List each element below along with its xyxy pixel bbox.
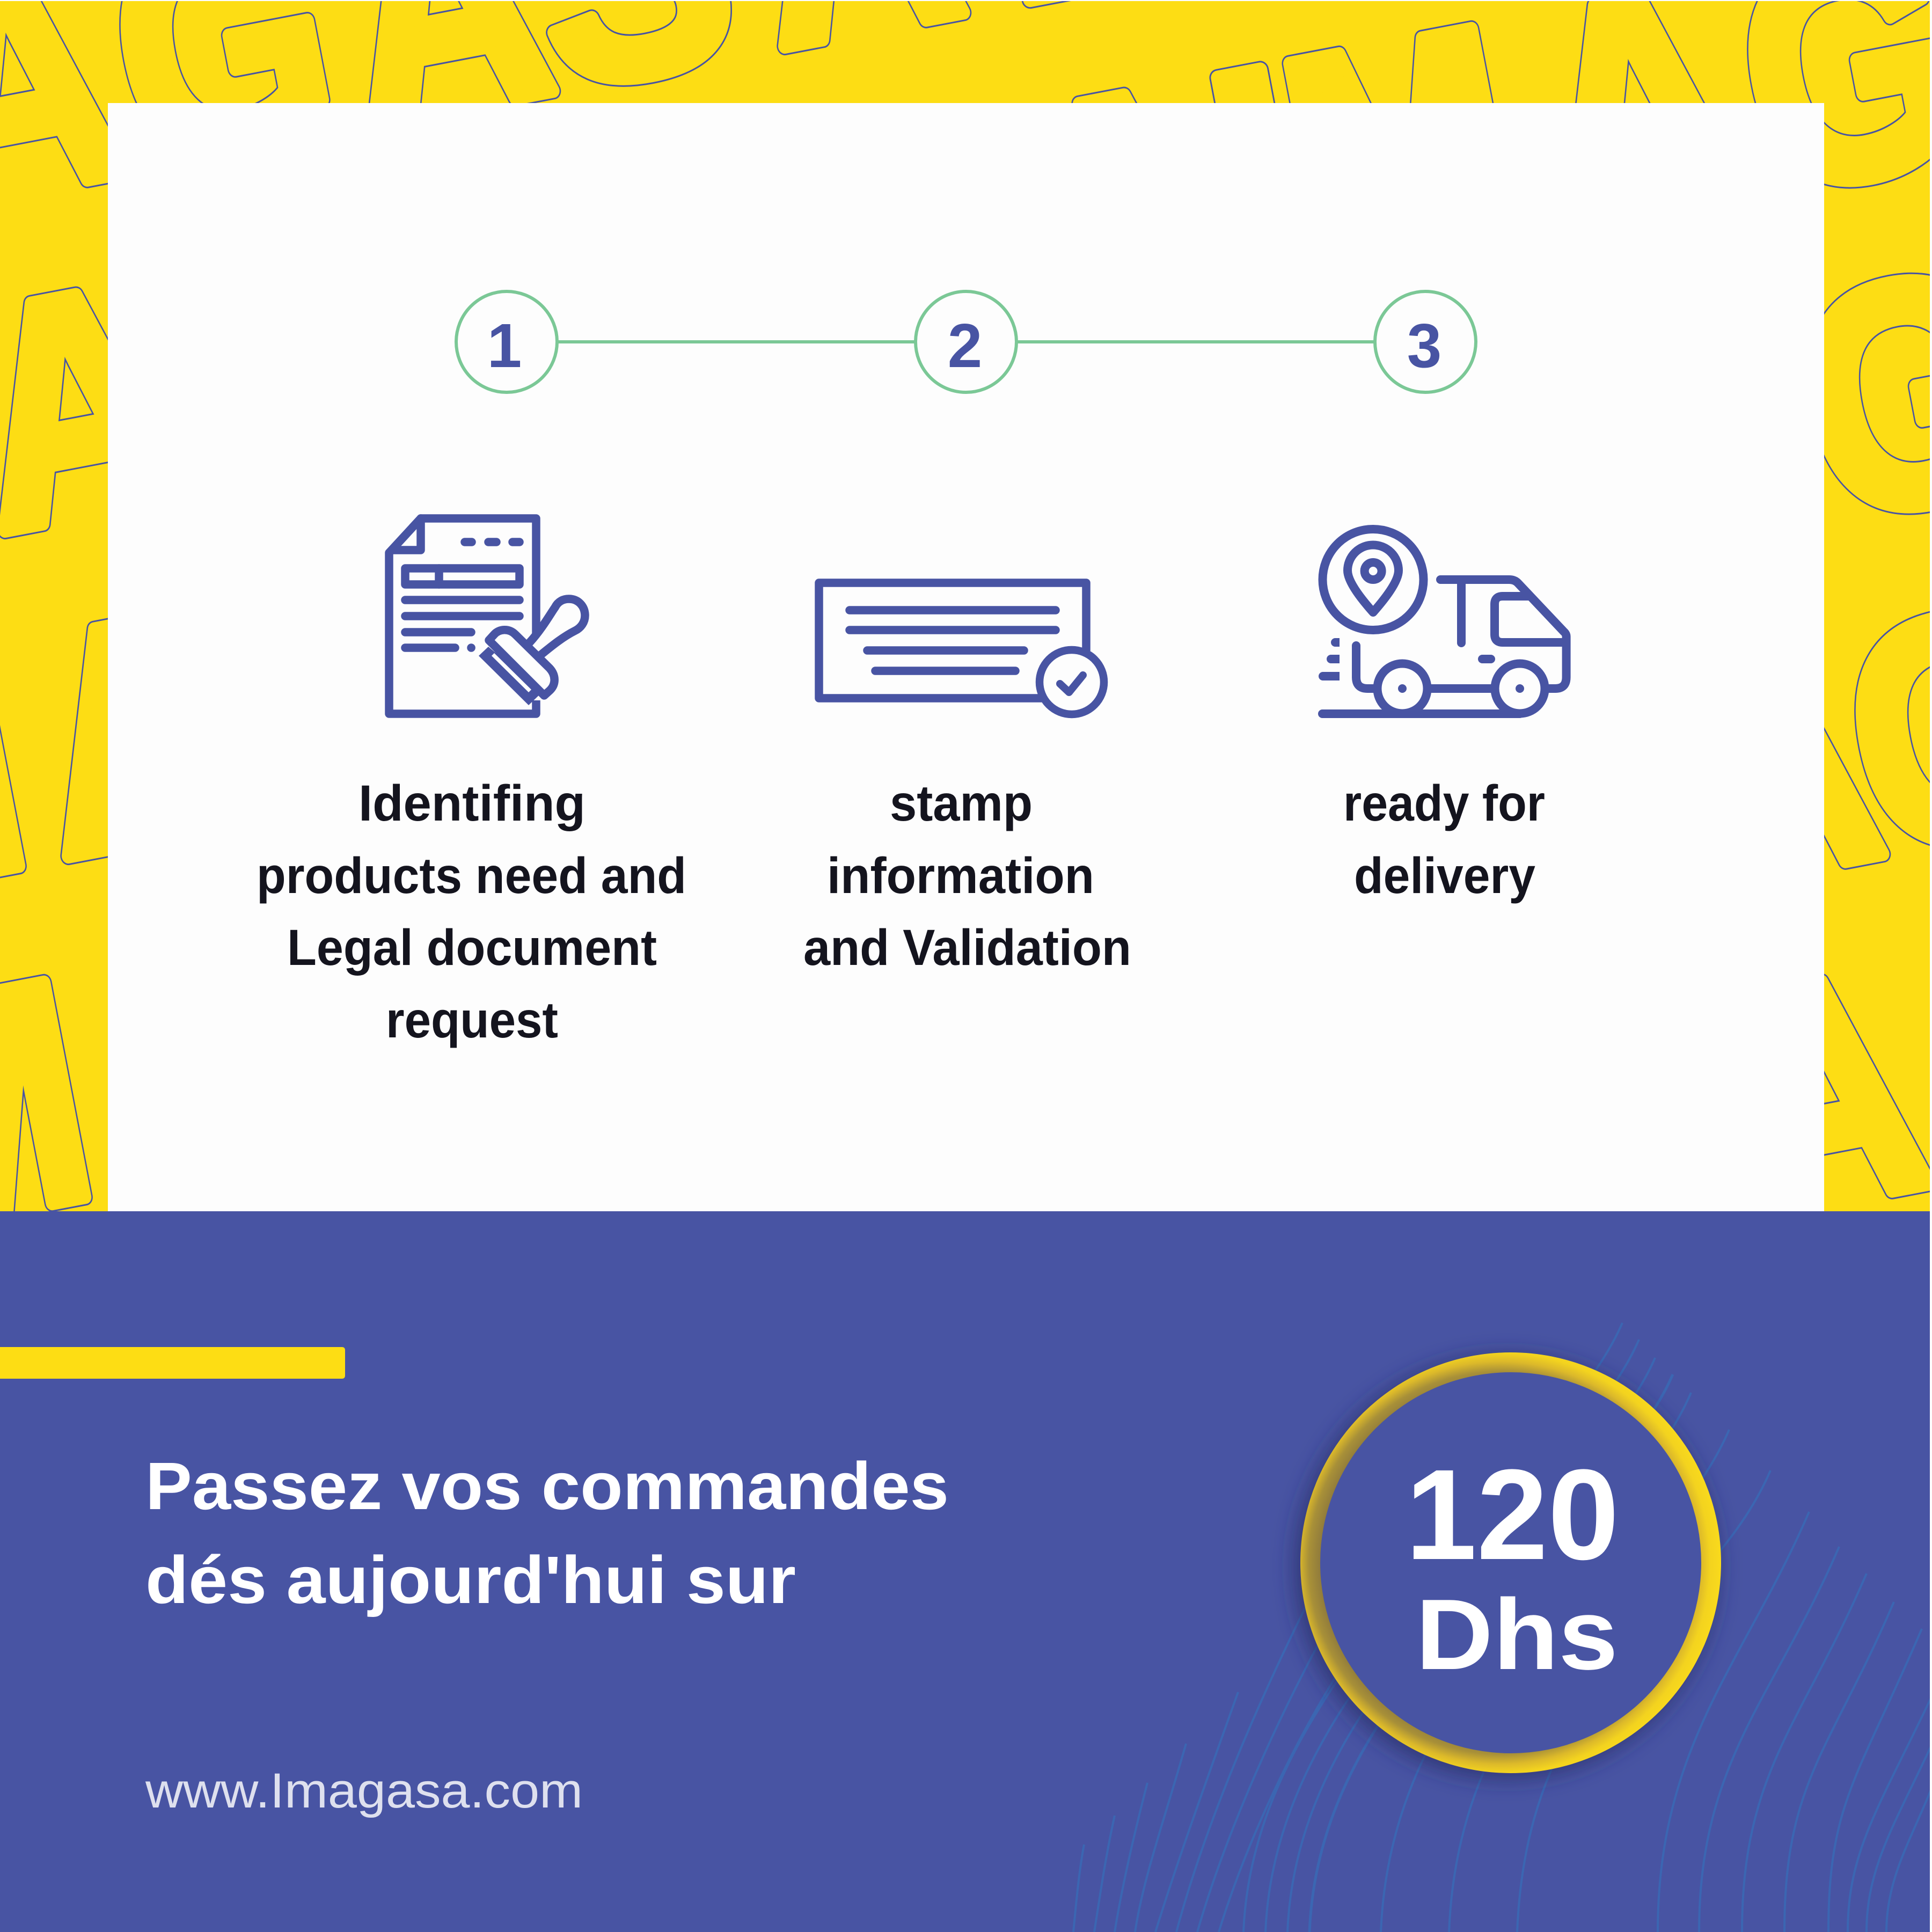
outlined letters pattern: A [1569,241,1829,626]
step timeline [456,291,1476,392]
step 1 label: request [386,992,558,1049]
outlined letters pattern [0,0,1932,1301]
step 1 label: Identifing [358,775,586,832]
decorative wave lines [1073,1323,1932,1932]
icon: stamped form with check [819,583,1104,714]
price value: 120 [1406,1443,1619,1586]
step 3 badge [1375,291,1476,392]
step 1 label: Legal document [287,919,657,976]
step 3 label [1343,775,1545,904]
outlined letters pattern: A [8,539,267,924]
price value [1406,1443,1619,1690]
step 1 badge: 1 [487,311,522,380]
step 2 label: information [827,847,1094,904]
step 3 badge: 3 [1407,311,1441,380]
outlined letters pattern: A [1643,571,1903,955]
step 1 label [257,775,686,1049]
outlined letters pattern: A [992,14,1252,398]
panel: blue footer [0,1211,1932,1932]
yellow patterned background [0,0,1932,1301]
outlined letters pattern: A [992,14,1252,398]
step 1 badge [456,291,557,392]
icon: document with stamp [389,518,585,714]
step 2 label: stamp [890,775,1033,832]
heading [145,1449,949,1618]
outlined letters pattern: A [8,539,267,924]
panel: white steps card [108,103,1824,1213]
price badge [1295,1352,1721,1779]
step 3 label: delivery [1354,847,1535,904]
step 2 badge [916,291,1016,392]
outlined letters pattern: I [1185,0,1334,362]
outlined letters pattern: A [1643,571,1903,955]
outlined letters pattern: I [1185,0,1334,362]
step 2 badge: 2 [948,311,982,380]
outlined letters pattern: A [1569,241,1829,626]
website url: www.Imagasa.com [145,1763,583,1818]
step 2 label [803,775,1131,976]
heading: Passez vos commandes [145,1449,949,1524]
heading: dés aujourd'hui sur [145,1543,796,1618]
step 2 label: and Validation [803,919,1131,976]
accent bar [0,1347,345,1379]
step 3 label: ready for [1343,775,1545,832]
icon: delivery truck with location pin [1319,529,1567,714]
step 1 label: products need and [257,847,686,904]
price value: Dhs [1416,1578,1618,1690]
